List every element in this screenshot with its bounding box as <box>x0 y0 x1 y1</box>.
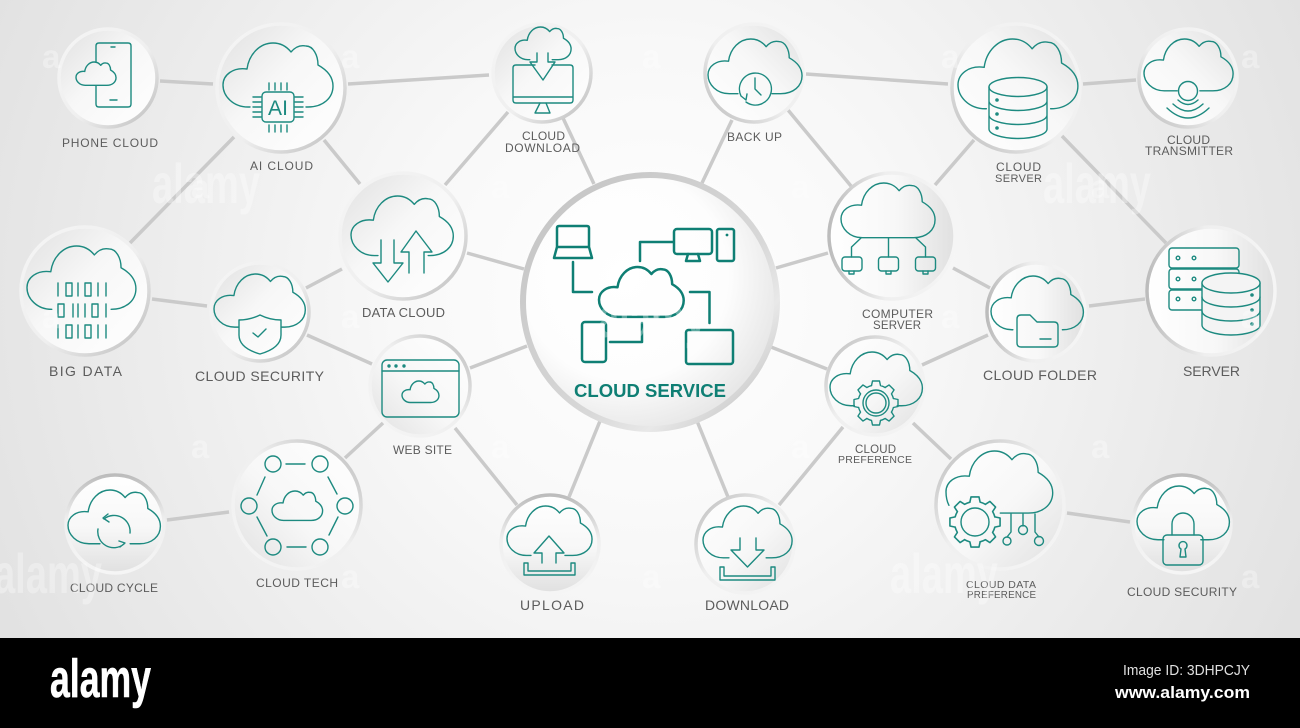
icon: folder cloud <box>991 276 1083 347</box>
label: PHONE CLOUD <box>62 136 158 150</box>
label: COMPUTER <box>862 307 933 321</box>
label: TRANSMITTER <box>1145 144 1233 158</box>
watermarks <box>0 38 1260 605</box>
icon: gear cloud <box>830 352 922 425</box>
icon: server rack and database <box>1169 248 1260 335</box>
icon: cloud network of computers <box>841 183 936 274</box>
label: CLOUD <box>1167 133 1210 147</box>
label: CLOUD DATA <box>966 579 1036 591</box>
panel: phone cloud <box>59 29 158 150</box>
icon: upload cloud <box>507 506 592 575</box>
watermarks: a <box>341 298 360 335</box>
panel: central cloud service hub <box>523 175 777 429</box>
label: CLOUD CYCLE <box>70 581 158 595</box>
icon: padlock cloud <box>1137 486 1229 565</box>
panel: cloud server <box>952 24 1080 185</box>
icon: monitor with download cloud <box>513 27 573 113</box>
watermarks: a <box>642 298 661 335</box>
watermarks: alamy <box>152 152 260 215</box>
label <box>505 129 580 155</box>
icon: refresh cloud <box>68 490 160 548</box>
label <box>862 307 933 332</box>
label <box>838 444 912 466</box>
watermarks: a <box>791 428 810 465</box>
panel: server <box>1147 227 1275 379</box>
icon: cloud with hexagon nodes <box>241 456 353 555</box>
watermarks: a <box>42 38 61 75</box>
heading: cloud service: CLOUD SERVICE <box>574 380 726 401</box>
icon: browser window cloud <box>382 360 459 417</box>
watermarks: a <box>642 558 661 595</box>
label: CLOUD <box>996 160 1041 174</box>
label: PREFERENCE <box>838 454 912 466</box>
panel: upload <box>501 495 599 613</box>
watermarks: a <box>42 298 61 335</box>
panel: cloud transmitter <box>1139 29 1237 158</box>
watermarks: a <box>941 298 960 335</box>
label: PREFERENCE <box>967 590 1036 601</box>
watermarks: a <box>1091 428 1110 465</box>
label: CLOUD FOLDER <box>983 367 1097 383</box>
label <box>1145 133 1233 158</box>
panel: web site <box>370 336 470 457</box>
watermarks: a <box>1241 558 1260 595</box>
label: CLOUD TECH <box>256 576 338 590</box>
watermarks: a <box>1091 168 1110 205</box>
label <box>966 579 1036 601</box>
icon: clock cloud <box>708 39 802 105</box>
icon: binary cloud <box>27 246 136 338</box>
label: UPLOAD <box>520 597 584 613</box>
label: BACK UP <box>727 130 782 144</box>
watermarks: a <box>491 428 510 465</box>
panel: back up <box>705 24 803 144</box>
icon: AI chip cloud: AI <box>268 97 288 120</box>
panel: cloud folder <box>983 263 1097 383</box>
watermarks: a <box>791 168 810 205</box>
watermarks: alamy <box>1043 152 1151 215</box>
label: SERVER <box>1183 363 1240 379</box>
label: AI CLOUD <box>250 159 313 173</box>
label: CLOUD <box>855 444 896 456</box>
label: CLOUD <box>522 129 565 143</box>
label: DATA CLOUD <box>362 305 445 320</box>
watermarks: a <box>491 168 510 205</box>
watermarks: alamy <box>890 542 998 605</box>
icon: transmitter cloud <box>1144 39 1233 118</box>
site url: www.alamy.com <box>1114 683 1250 702</box>
panel: cloud tech <box>233 441 361 590</box>
watermarks: a <box>1241 38 1260 75</box>
icon: phone cloud <box>76 43 131 107</box>
panel: cloud download <box>493 24 591 155</box>
icon: devices connected to cloud <box>554 226 734 364</box>
panel: cloud security left <box>195 263 325 384</box>
watermarks: a <box>1241 298 1260 335</box>
icon: up and down arrows cloud <box>351 196 453 282</box>
panel: download <box>696 495 794 613</box>
panel: cloud security right <box>1127 475 1237 599</box>
watermarks: alamy <box>598 286 706 349</box>
label: DOWNLOAD <box>505 141 580 155</box>
watermarks: a <box>642 38 661 75</box>
label: WEB SITE <box>393 443 452 457</box>
label <box>995 160 1042 185</box>
icon: gear and circuit cloud <box>946 451 1053 547</box>
panel: AI cloud <box>217 24 345 173</box>
icon: shield cloud <box>214 274 305 354</box>
footer logo: alamy <box>50 649 151 709</box>
footer bar <box>0 638 1300 728</box>
label: DOWNLOAD <box>705 597 789 613</box>
watermarks: a <box>191 428 210 465</box>
watermarks: a <box>191 168 210 205</box>
icon: database cloud <box>958 39 1078 138</box>
watermarks: a <box>341 38 360 75</box>
image id: Image ID: 3DHPCJY <box>1123 662 1250 679</box>
label: SERVER <box>995 173 1042 185</box>
label: BIG DATA <box>49 363 123 379</box>
icon: AI chip cloud <box>223 43 333 132</box>
icon: download cloud <box>703 506 792 580</box>
watermarks: a <box>341 558 360 595</box>
panel: data cloud <box>340 173 466 320</box>
watermarks: a <box>941 38 960 75</box>
panel: cloud data preference <box>936 441 1064 601</box>
label: SERVER <box>873 320 921 332</box>
panel: cloud cycle <box>66 475 164 595</box>
panel: computer server <box>829 173 955 332</box>
connecting lines <box>130 74 1166 522</box>
panel: big data <box>21 227 149 379</box>
label: CLOUD SECURITY <box>195 368 325 384</box>
label: CLOUD SECURITY <box>1127 585 1237 599</box>
panel: cloud preference <box>826 337 924 466</box>
